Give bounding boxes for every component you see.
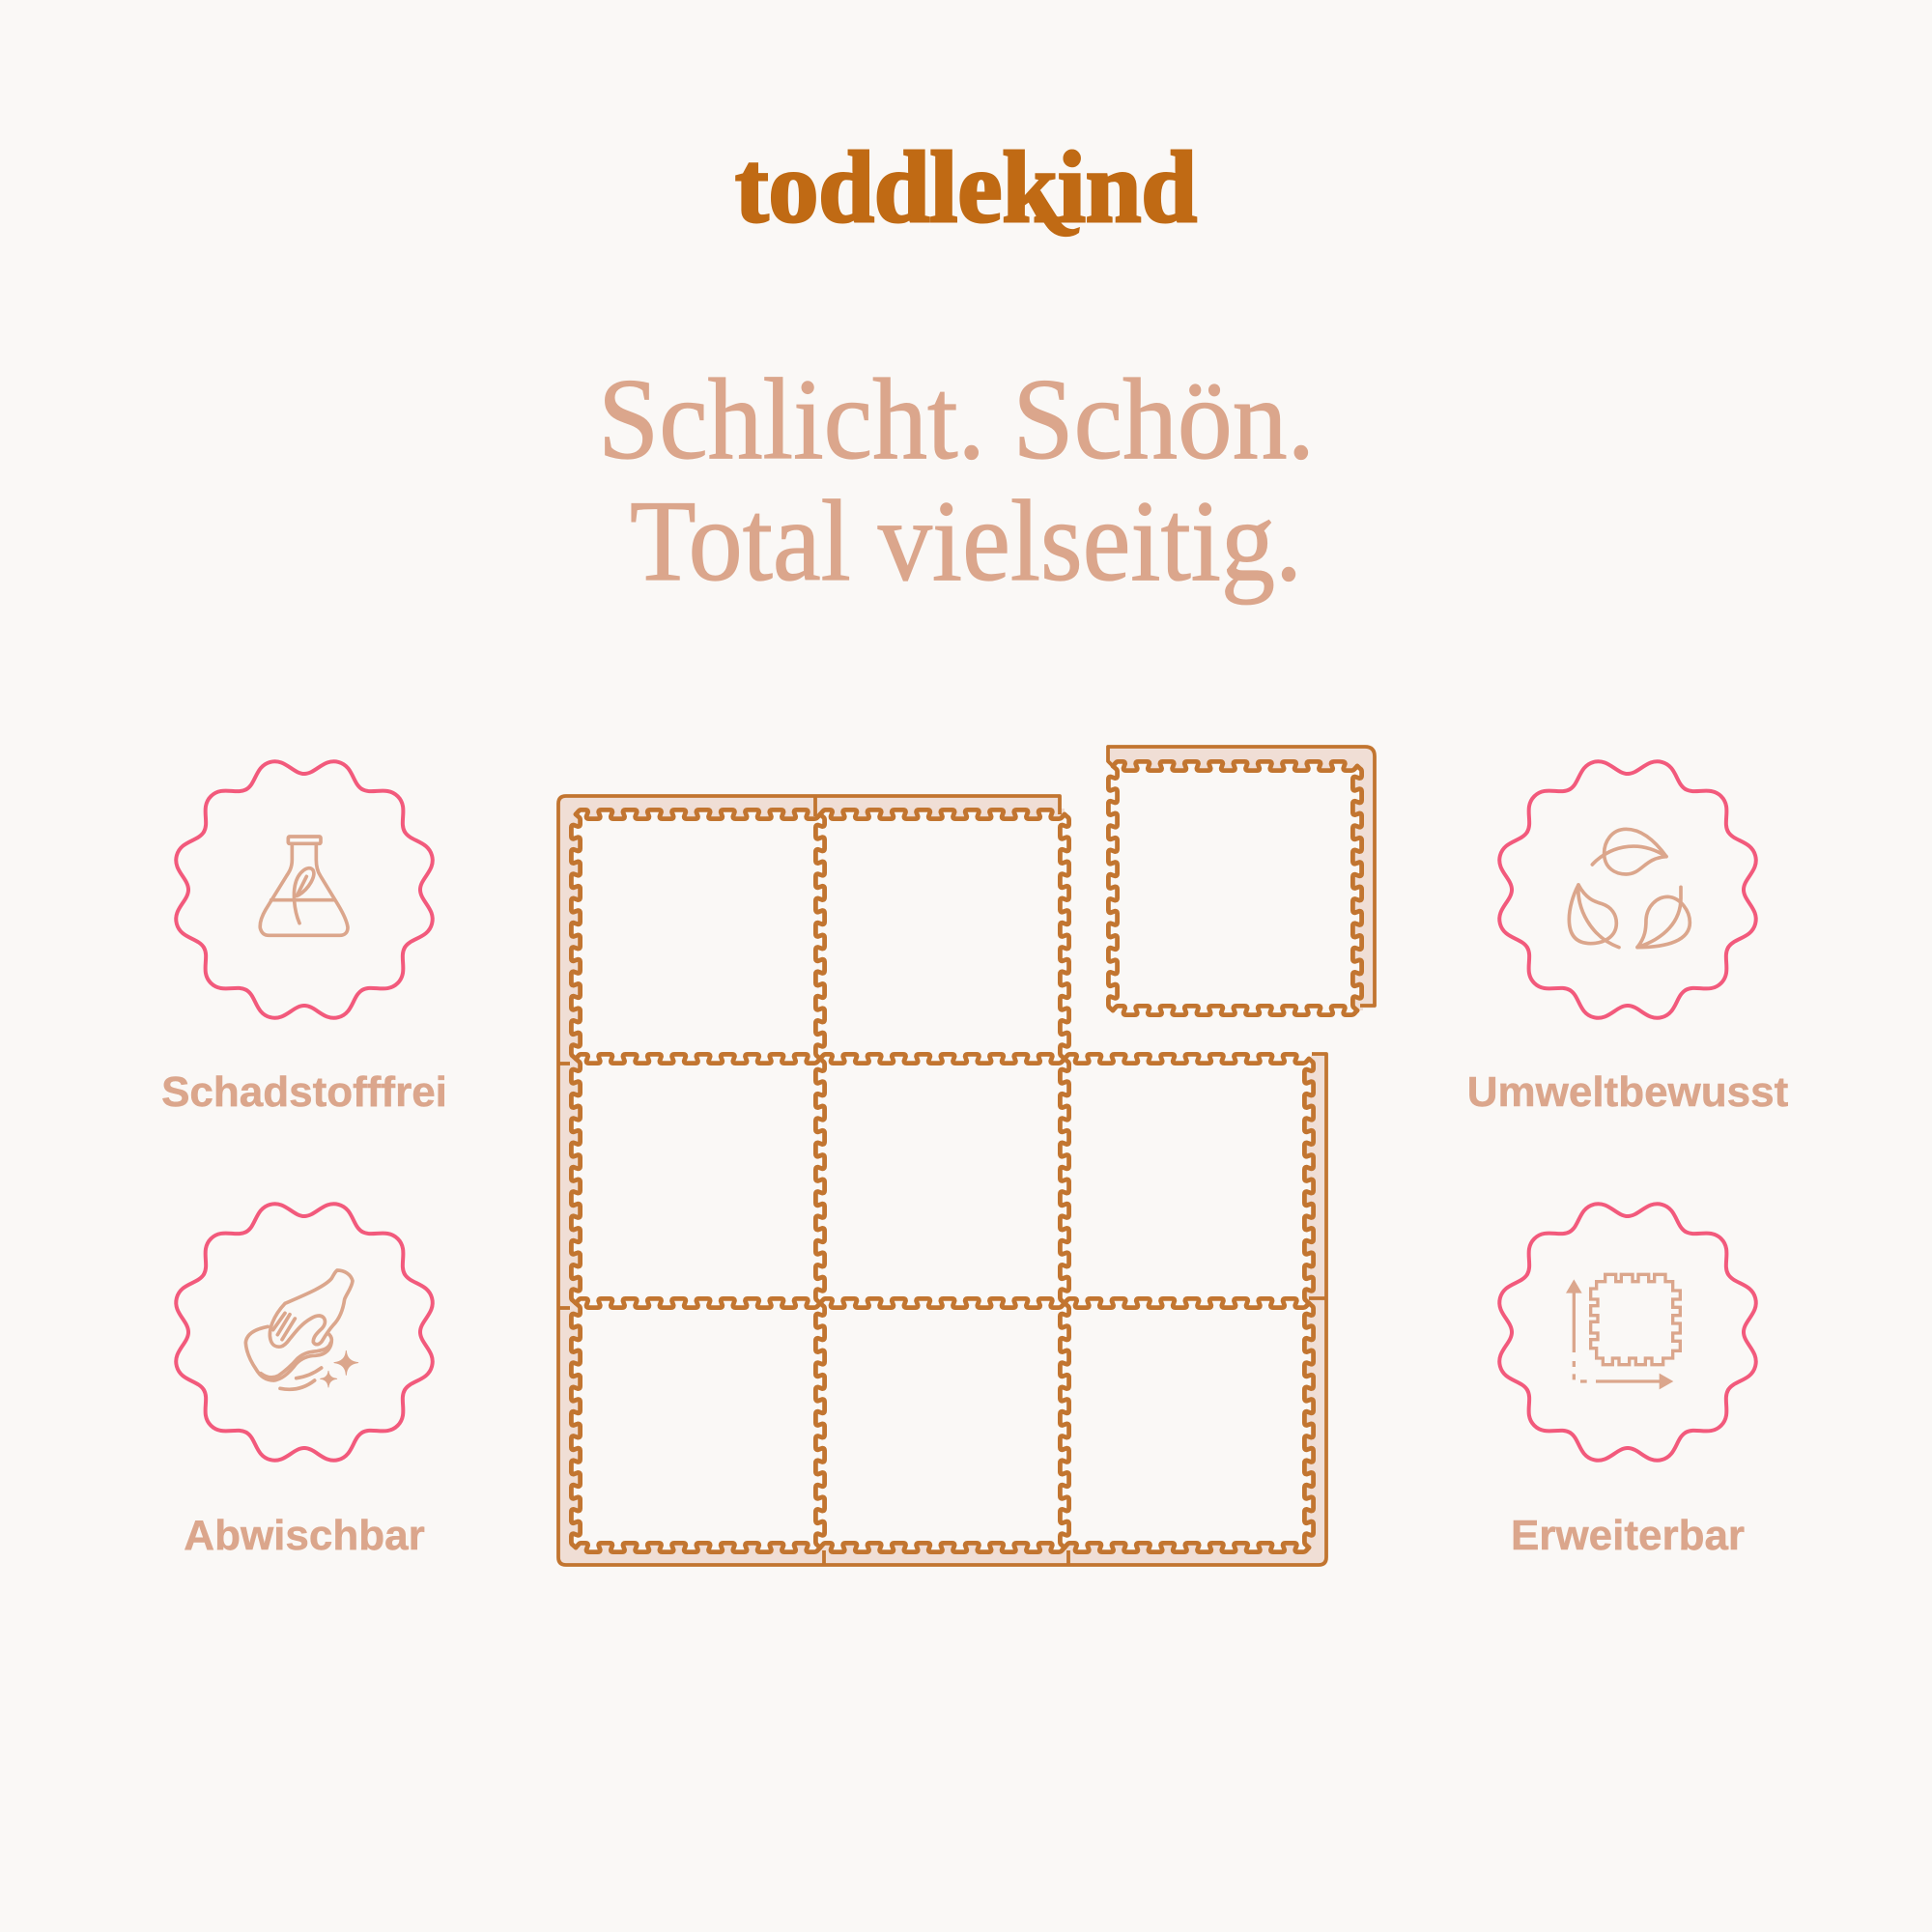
- feature: Erweiterbar: [1488, 1192, 1768, 1559]
- label: Erweiterbar: [1511, 1512, 1745, 1559]
- mat outer outline and seams: [558, 747, 1375, 1565]
- icon: three leaves: [1569, 829, 1690, 948]
- icon: hand wiping with cloth and sparkles: [245, 1270, 358, 1389]
- play mat diagram: [557, 747, 1382, 1566]
- heading: Schlicht. Schön. Total vielseitig.: Total vielseitig.: [630, 476, 1302, 605]
- badge outline: [164, 750, 444, 1030]
- puzzle interlock edges: nine mat tiles: [571, 810, 1314, 1552]
- feature: Abwischbar: [164, 1192, 444, 1559]
- detached mat tile, top right: [1108, 761, 1362, 1015]
- badge outline: [1488, 750, 1768, 1030]
- mat border fill bands: [557, 747, 1382, 1566]
- feature: Schadstofffrei: [161, 750, 447, 1116]
- label: Umweltbewusst: [1467, 1068, 1789, 1116]
- badge outline: [164, 1192, 444, 1472]
- heading: Schlicht. Schön. Total vielseitig.: [598, 355, 1315, 605]
- label: Schadstofffrei: [161, 1068, 447, 1116]
- icon: expandable tile with arrows: [1566, 1274, 1680, 1389]
- feature: Umweltbewusst: [1467, 750, 1789, 1116]
- label: Abwischbar: [184, 1512, 425, 1559]
- icon: flask with leaf: [260, 837, 348, 935]
- logo: toddlekind: toddlekind: [735, 130, 1197, 243]
- badge outline: [1488, 1192, 1768, 1472]
- heading: Schlicht. Schön. Total vielseitig.: Schlicht. Schön.: [598, 355, 1315, 483]
